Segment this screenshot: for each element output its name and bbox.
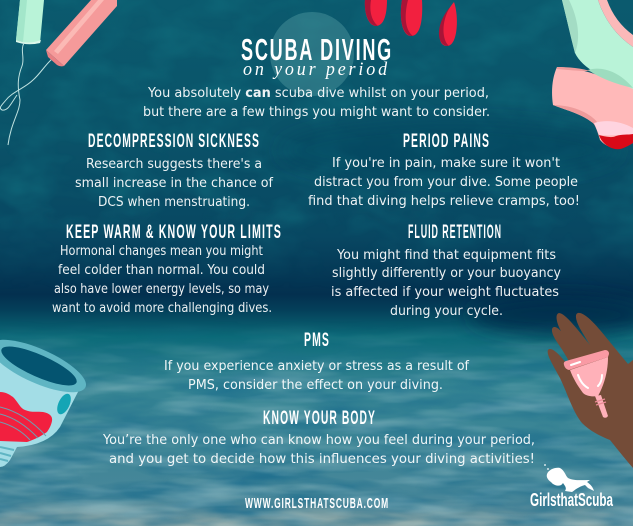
section: PMS <box>164 330 470 393</box>
icon: pink tampon <box>46 0 117 66</box>
section: decompression sickness: Research suggests there's a <box>86 156 262 172</box>
section: know your body <box>102 408 535 467</box>
section: decompression sickness: DCS when menstruating. <box>98 194 250 210</box>
section: fluid retention: You might find that equipment fits <box>336 247 556 263</box>
section: know your body: and you get to decide how this influences your diving activities! <box>109 451 535 467</box>
section: keep warm and know your limits: want to avoid more challenging dives. <box>52 300 272 316</box>
section: fluid retention: during your cycle. <box>390 303 503 319</box>
section: period pains: find that diving helps relieve cramps, too! <box>308 193 580 209</box>
section: know your body: KNOW YOUR BODY <box>263 408 376 429</box>
title <box>241 12 393 96</box>
section: fluid retention: slightly differently or your buoyancy <box>332 265 561 281</box>
icon: hand holding cup <box>548 313 633 468</box>
section: period pains: If you're in pain, make sure it won't <box>332 155 560 171</box>
section: keep warm and know your limits: Hormonal changes mean you might <box>60 243 263 259</box>
section: fluid retention: FLUID RETENTION <box>408 222 502 243</box>
section: period pains: distract you from your dive. Some people <box>314 174 578 190</box>
icon: menstrual cup <box>0 329 92 467</box>
icon: green tampon <box>0 0 53 145</box>
intro text: You absolutely can scuba dive whilst on your period, <box>147 85 489 101</box>
icon: blood drops <box>365 0 457 46</box>
section: PMS: PMS, consider the effect on your diving. <box>188 377 443 393</box>
title: on your period <box>243 59 390 80</box>
section: fluid retention: is affected if your weight fluctuates <box>331 284 559 300</box>
logo: GirlsthatScuba <box>530 464 614 510</box>
section: keep warm and know your limits: KEEP WARM & KNOW YOUR LIMITS <box>66 222 282 243</box>
website url: WWW.GIRLSTHATSCUBA.COM <box>245 495 389 512</box>
section: keep warm and know your limits: also have lower energy levels, so may <box>54 281 269 297</box>
intro text <box>143 85 490 120</box>
section: decompression sickness <box>75 131 274 210</box>
section: decompression sickness: small increase in the chance of <box>75 175 274 191</box>
section: keep warm and know your limits <box>52 222 282 316</box>
section: decompression sickness: DECOMPRESSION SICKNESS <box>88 131 260 152</box>
section: know your body: You’re the only one who can know how you feel during your period, <box>102 432 535 448</box>
section: fluid retention <box>331 222 561 319</box>
section: period pains: PERIOD PAINS <box>403 131 490 152</box>
icon: underwear <box>552 0 633 149</box>
section: keep warm and know your limits: feel colder than normal. You could <box>58 262 265 278</box>
section: period pains <box>308 131 580 209</box>
intro text: but there are a few things you might want to consider. <box>143 104 490 120</box>
title: SCUBA DIVING <box>241 32 393 67</box>
section: PMS: If you experience anxiety or stress as a result of <box>164 358 470 374</box>
section: PMS: PMS <box>304 330 330 351</box>
